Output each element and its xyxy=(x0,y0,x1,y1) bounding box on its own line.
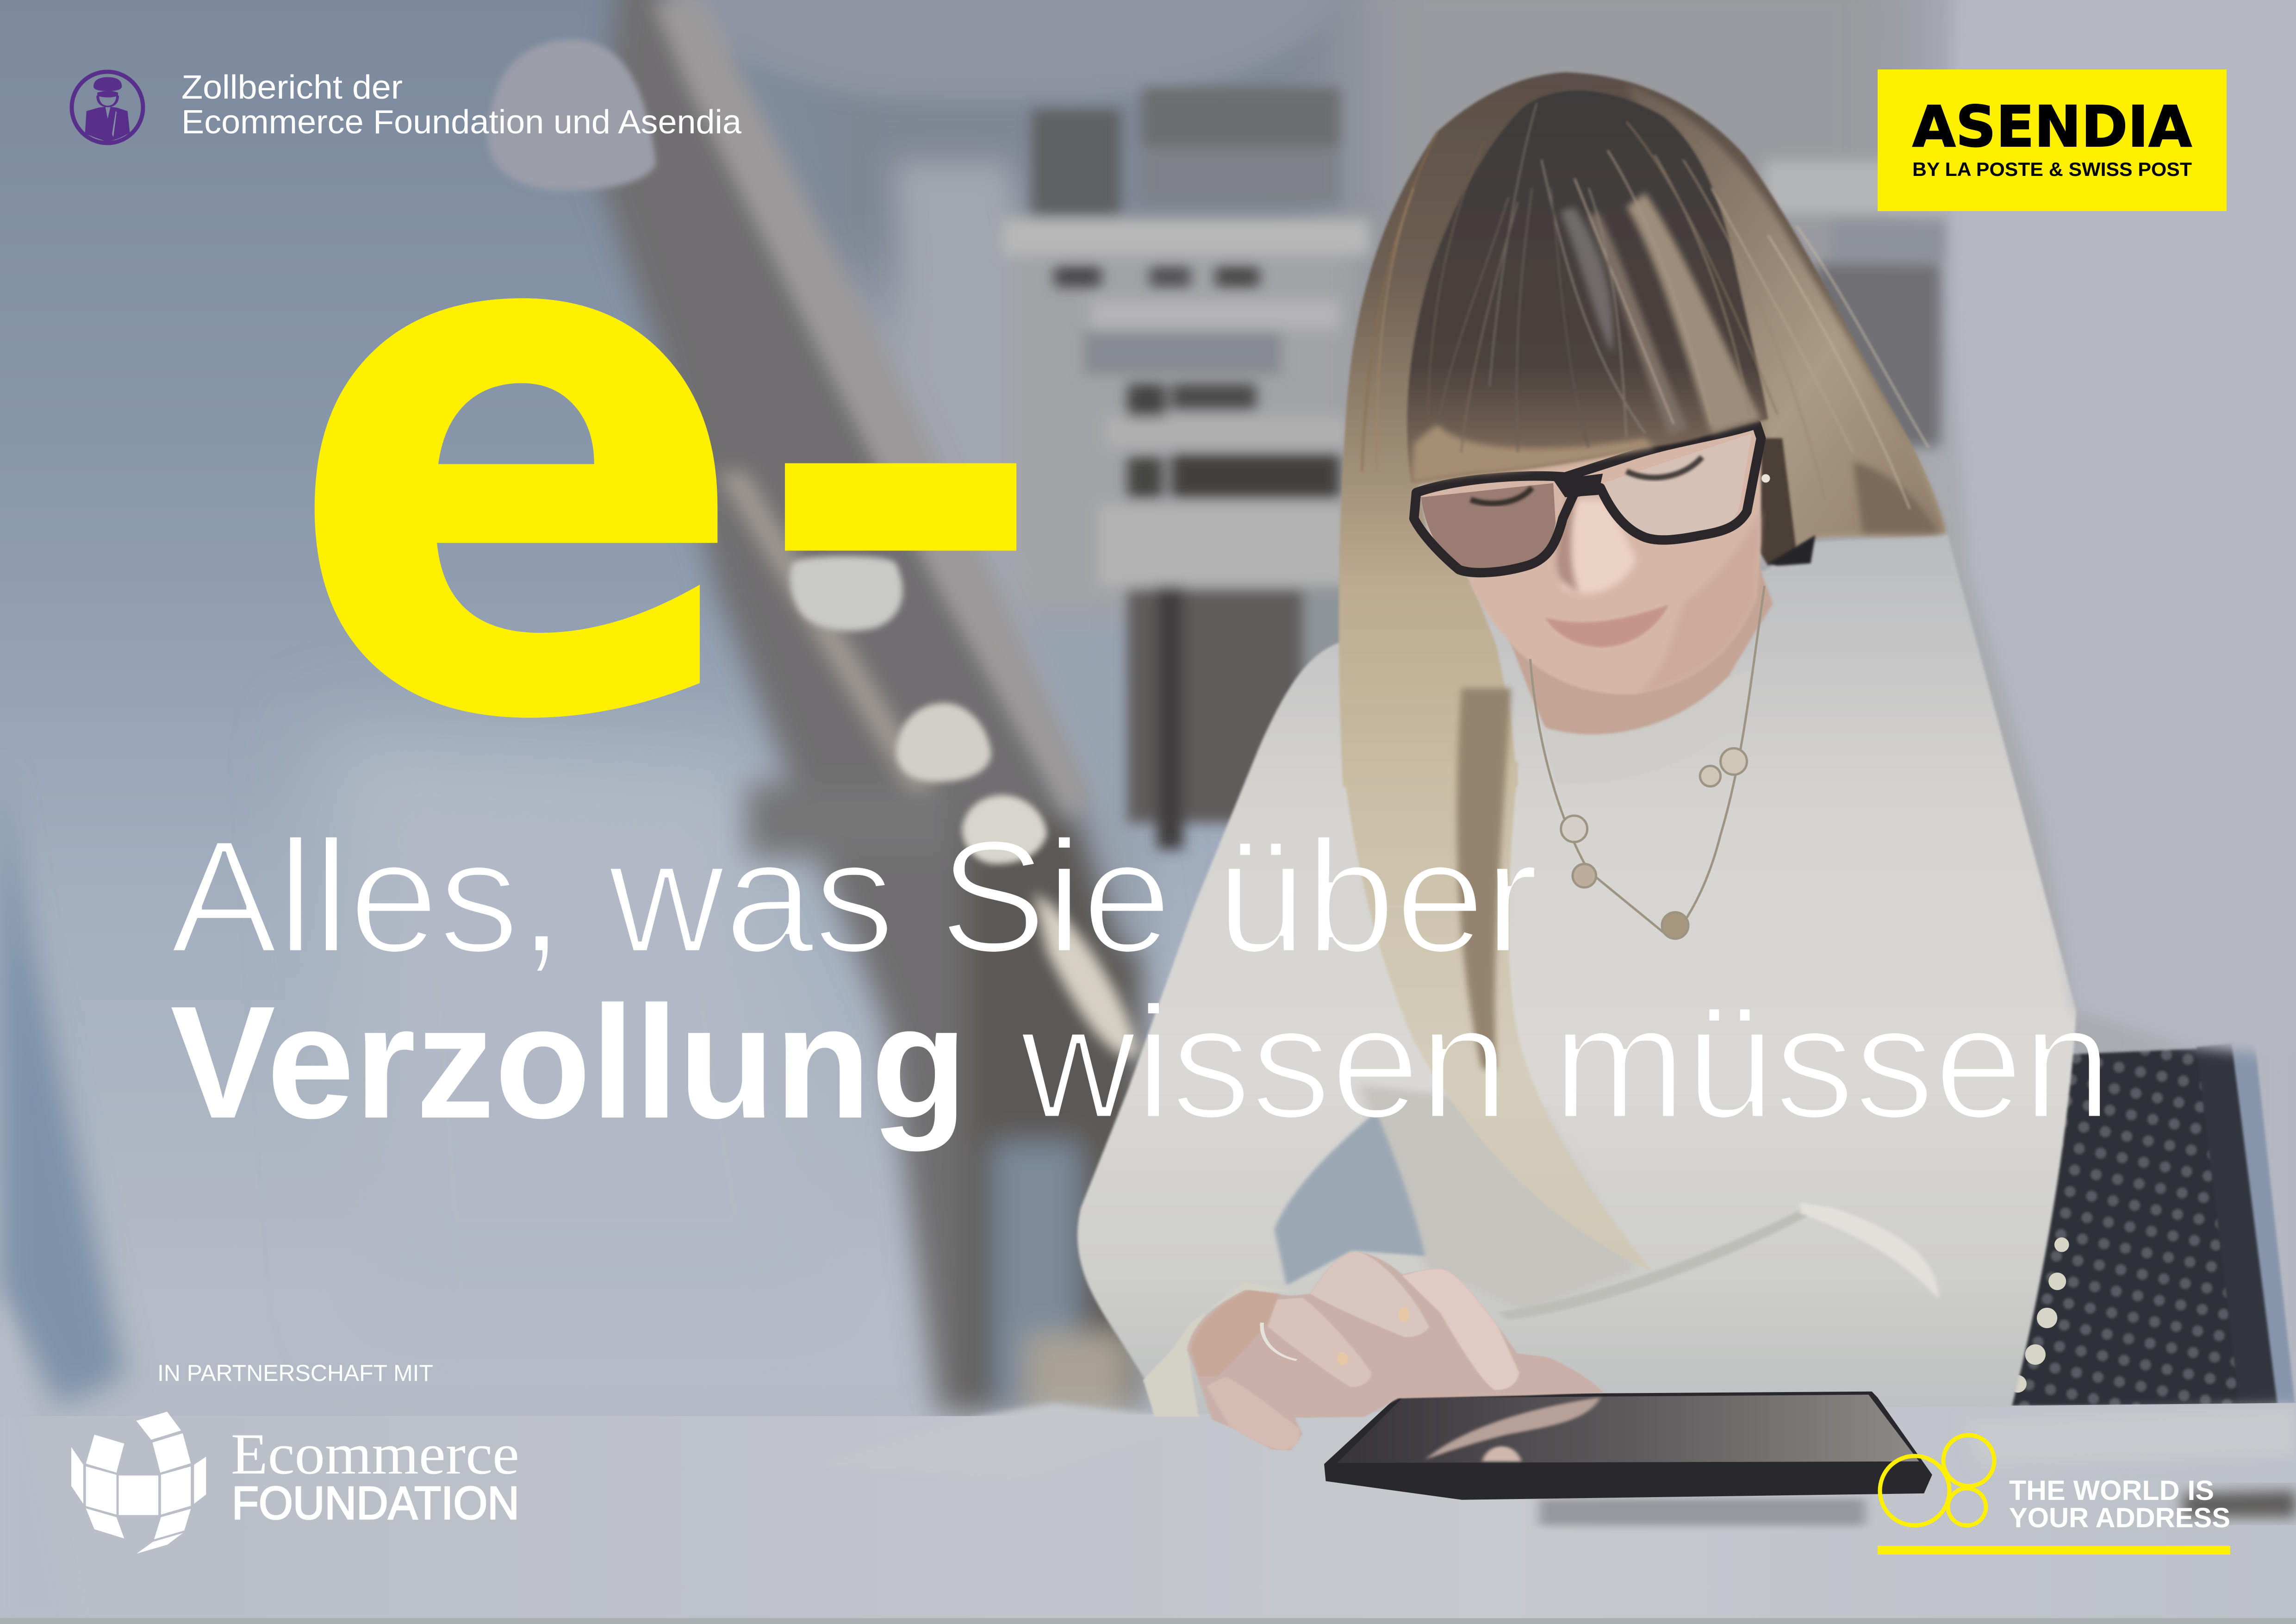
report title text: Zollbericht der xyxy=(181,69,403,106)
logo: The world is your address: YOUR ADDRESS xyxy=(2009,1502,2230,1533)
right hair side xyxy=(1626,84,1945,556)
headline xyxy=(170,807,2112,1153)
title: e- xyxy=(285,30,1053,880)
left foreground edge xyxy=(0,762,124,1624)
icon: three rings xyxy=(1880,1435,1994,1525)
logo: The world is your address: THE WORLD IS xyxy=(2009,1475,2214,1506)
wordmark: Ecommerce xyxy=(231,1422,519,1487)
eyes xyxy=(1471,488,1532,503)
neck xyxy=(1499,566,1773,742)
bangs xyxy=(1407,91,1768,483)
ring xyxy=(1262,1323,1297,1360)
ceiling lamps xyxy=(488,39,1047,864)
icon: customs officer badge xyxy=(72,72,143,143)
necklace xyxy=(1530,586,1764,939)
lens right xyxy=(1603,433,1752,538)
long hair xyxy=(1339,72,1945,787)
tablet screen xyxy=(1337,1395,1919,1463)
hand on tablet xyxy=(1143,1252,1604,1450)
headline: Alles, was Sie über xyxy=(170,807,1538,986)
ring finger xyxy=(1268,1298,1371,1387)
chair with perforated back xyxy=(2003,1043,2296,1413)
collar xyxy=(1542,670,1749,784)
table surface xyxy=(0,1289,2296,1624)
headline: Verzollung xyxy=(170,973,967,1153)
hand reflection xyxy=(1425,1397,1600,1460)
logo: Ecommerce Foundation xyxy=(71,1412,519,1554)
light diagonal beam xyxy=(652,0,1091,820)
shirt cuff xyxy=(1143,1282,1291,1417)
glasses frame xyxy=(1414,424,1761,573)
thumb xyxy=(1207,1376,1300,1450)
report title text xyxy=(181,69,742,141)
logo: Asendia: ASENDIA xyxy=(1912,94,2192,160)
report title text: Ecommerce Foundation und Asendia xyxy=(181,104,742,141)
lips xyxy=(1545,605,1669,647)
hand base xyxy=(1187,1252,1604,1450)
title: e-: - xyxy=(749,33,1053,853)
lower hair strands xyxy=(1343,762,1652,1271)
dark underside near ear xyxy=(1756,438,1797,566)
icon: faceted globe xyxy=(71,1412,206,1554)
hair tail and face xyxy=(1343,91,1929,1271)
wall behind beam xyxy=(893,161,1150,937)
shelving xyxy=(1033,110,1120,215)
woman's sweater xyxy=(1077,535,2076,1418)
nose highlight xyxy=(1557,500,1636,594)
logo: The world is your address xyxy=(1878,1435,2230,1555)
tablet shadow xyxy=(1539,1499,1865,1525)
face xyxy=(1419,424,1761,694)
woman's hair back and neck xyxy=(1339,72,1945,787)
shelves right of the head xyxy=(1764,161,1948,214)
partner label: IN PARTNERSCHAFT MIT xyxy=(157,1360,433,1386)
dark ceiling band xyxy=(597,0,1142,1413)
middle finger xyxy=(1310,1252,1429,1337)
lens left xyxy=(1421,483,1556,571)
wordmark xyxy=(231,1422,519,1529)
index finger xyxy=(1402,1269,1519,1390)
wordmark: FOUNDATION xyxy=(232,1477,519,1529)
tablet xyxy=(1324,1392,1932,1525)
tablet body xyxy=(1324,1392,1932,1500)
foreground blurred column at right xyxy=(1950,0,2296,1057)
shelving base xyxy=(1018,227,1362,615)
headline: wissen müssen xyxy=(1018,973,2112,1152)
ceiling tube xyxy=(652,0,1355,100)
hair parting and strands xyxy=(1362,103,1929,509)
title: e-: e xyxy=(285,30,751,880)
nails xyxy=(1399,1307,1409,1322)
logo: Asendia: BY LA POSTE & SWISS POST xyxy=(1912,158,2192,180)
wrist xyxy=(1191,1290,1279,1376)
gap between arm and torso xyxy=(1275,1085,1939,1320)
earring xyxy=(1761,474,1770,483)
logo: Asendia xyxy=(1878,69,2227,211)
